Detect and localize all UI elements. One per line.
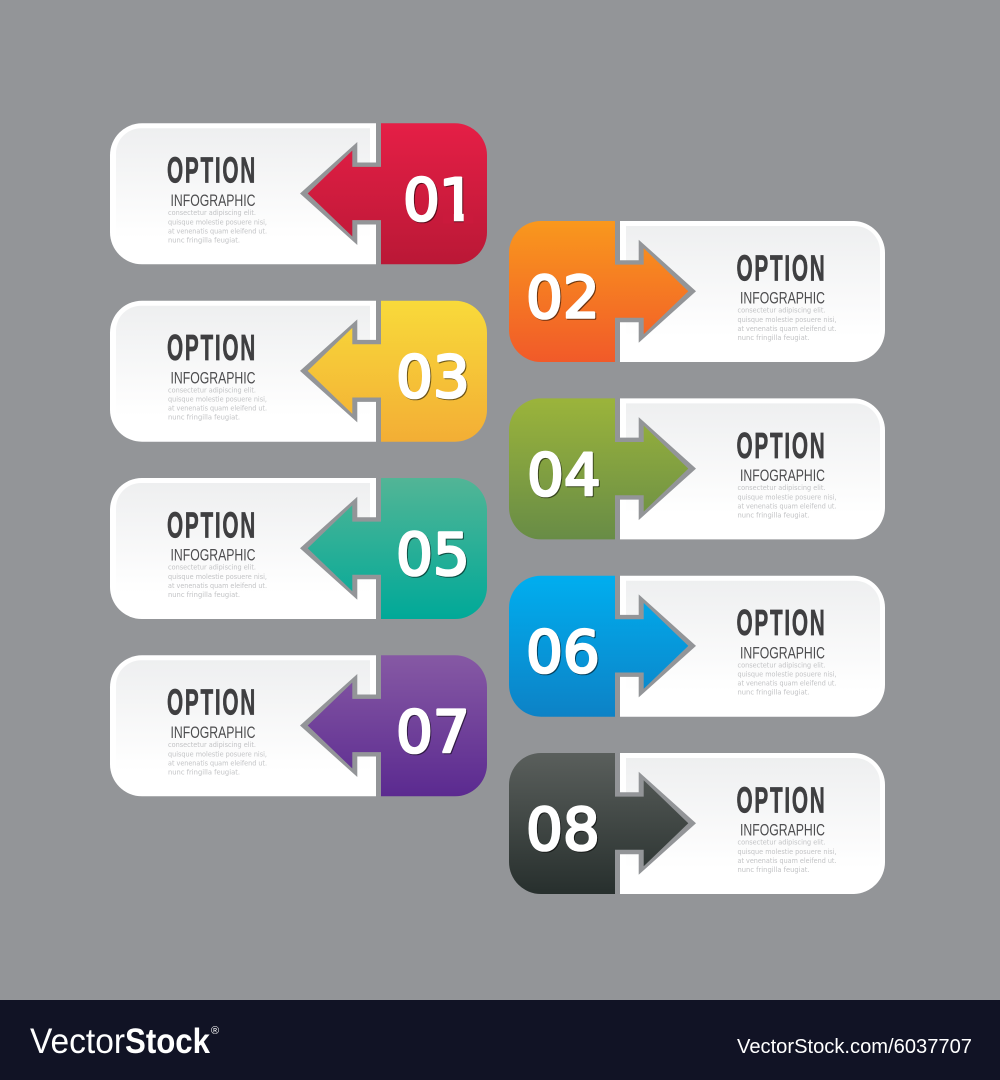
text block 02: quisque molestie posuere nisi, (738, 316, 836, 324)
text block 04: at venenatis quam eleifend ut. (738, 502, 836, 510)
number 08: 08 (526, 796, 600, 864)
footer image id: VectorStock.com/6037707 (737, 1036, 972, 1058)
arrow tab 06 (509, 576, 688, 717)
card 01 (110, 123, 487, 264)
text block 06: nunc fringilla feugiat. (738, 689, 810, 697)
text block 07 (167, 682, 267, 776)
text block 01: OPTION (167, 150, 257, 191)
text block 05: INFOGRAPHIC (170, 547, 256, 565)
card 07 (110, 655, 487, 796)
text block 08: consectetur adipiscing elit. (738, 839, 826, 847)
footer logo: Vector (30, 1022, 125, 1061)
text block 08: nunc fringilla feugiat. (738, 866, 810, 874)
number 04: 04 (528, 442, 602, 510)
number 01: 0 (403, 166, 440, 234)
text block 07: consectetur adipiscing elit. (168, 741, 256, 749)
number 06: 06 (527, 619, 601, 687)
number 07: 07 (396, 698, 470, 766)
number 01: 1 (439, 166, 476, 234)
text block 05: consectetur adipiscing elit. (168, 564, 256, 572)
number 06: 06 (526, 618, 600, 686)
text block 01: at venenatis quam eleifend ut. (168, 227, 267, 235)
number 01: 1 (440, 167, 477, 235)
number 01 (403, 166, 477, 235)
text block 06: INFOGRAPHIC (740, 644, 825, 662)
text block 06: quisque molestie posuere nisi, (738, 671, 836, 679)
arrow tab 08 (509, 753, 688, 894)
text block 07: quisque molestie posuere nisi, (168, 750, 267, 758)
text block 07: nunc fringilla feugiat. (168, 768, 240, 776)
text block 01: INFOGRAPHIC (170, 192, 256, 210)
number 03: 03 (397, 344, 471, 412)
arrow tab 03 (308, 301, 487, 442)
text block 03: nunc fringilla feugiat. (168, 414, 240, 422)
text block 06: consectetur adipiscing elit. (738, 661, 826, 669)
number 08: 08 (527, 796, 601, 864)
text block 05: OPTION (167, 504, 257, 545)
arrow tab 05 (308, 478, 487, 619)
text block 04: quisque molestie posuere nisi, (738, 493, 836, 501)
card 06 (509, 576, 885, 717)
text block 05 (167, 504, 267, 599)
text block 04: INFOGRAPHIC (740, 467, 825, 485)
card 02 (509, 221, 885, 362)
text block 03: consectetur adipiscing elit. (168, 386, 256, 394)
text block 02: nunc fringilla feugiat. (738, 334, 810, 342)
arrow tab 07 (308, 655, 487, 796)
arrow tab 04 (509, 398, 688, 539)
text block 08: OPTION (736, 779, 826, 820)
text block 03: OPTION (167, 327, 257, 368)
text block 06: OPTION (736, 602, 826, 643)
number 01: 0 (404, 167, 441, 235)
text block 07: OPTION (167, 682, 257, 723)
text block 02 (736, 247, 836, 342)
number 05: 05 (397, 522, 471, 590)
number 04: 04 (527, 441, 601, 509)
number 02: 02 (527, 264, 601, 332)
text block 03: at venenatis quam eleifend ut. (168, 405, 267, 413)
footer bar (0, 1000, 1000, 1080)
card 08 (509, 753, 885, 894)
footer logo: Stock (125, 1022, 210, 1061)
text block 01: nunc fringilla feugiat. (168, 236, 240, 244)
number 02: 02 (526, 264, 600, 332)
text block 06 (736, 602, 836, 697)
text block 02: INFOGRAPHIC (740, 290, 825, 308)
text block 08: INFOGRAPHIC (740, 822, 825, 840)
footer logo: ® (211, 1025, 219, 1037)
text block 02: OPTION (736, 247, 826, 288)
card 03 (110, 301, 487, 442)
number 07: 07 (397, 699, 471, 767)
arrow tab 01 (308, 123, 487, 264)
text block 01: quisque molestie posuere nisi, (168, 218, 267, 226)
text block 08: quisque molestie posuere nisi, (738, 848, 836, 856)
text block 07: INFOGRAPHIC (170, 724, 256, 742)
text block 02: consectetur adipiscing elit. (738, 307, 826, 315)
text block 07: at venenatis quam eleifend ut. (168, 759, 267, 767)
text block 02: at venenatis quam eleifend ut. (738, 325, 836, 333)
card 04 (509, 398, 885, 539)
text block 03: INFOGRAPHIC (170, 369, 256, 387)
footer logo (30, 1022, 219, 1061)
arrow tab 02 (509, 221, 688, 362)
number 03: 03 (396, 343, 470, 411)
text block 08: at venenatis quam eleifend ut. (738, 857, 836, 865)
text block 01: consectetur adipiscing elit. (168, 209, 256, 217)
number 05: 05 (396, 520, 470, 588)
text block 05: at venenatis quam eleifend ut. (168, 582, 267, 590)
text block 03: quisque molestie posuere nisi, (168, 396, 267, 404)
text block 05: quisque molestie posuere nisi, (168, 573, 267, 581)
text block 05: nunc fringilla feugiat. (168, 591, 240, 599)
text block 04: consectetur adipiscing elit. (738, 484, 826, 492)
text block 06: at venenatis quam eleifend ut. (738, 680, 836, 688)
card 05 (110, 478, 487, 619)
text block 04: OPTION (736, 425, 826, 466)
text block 01 (167, 150, 267, 244)
text block 03 (167, 327, 267, 422)
text block 04 (736, 425, 836, 519)
text block 04: nunc fringilla feugiat. (738, 511, 810, 519)
text block 08 (736, 779, 836, 874)
